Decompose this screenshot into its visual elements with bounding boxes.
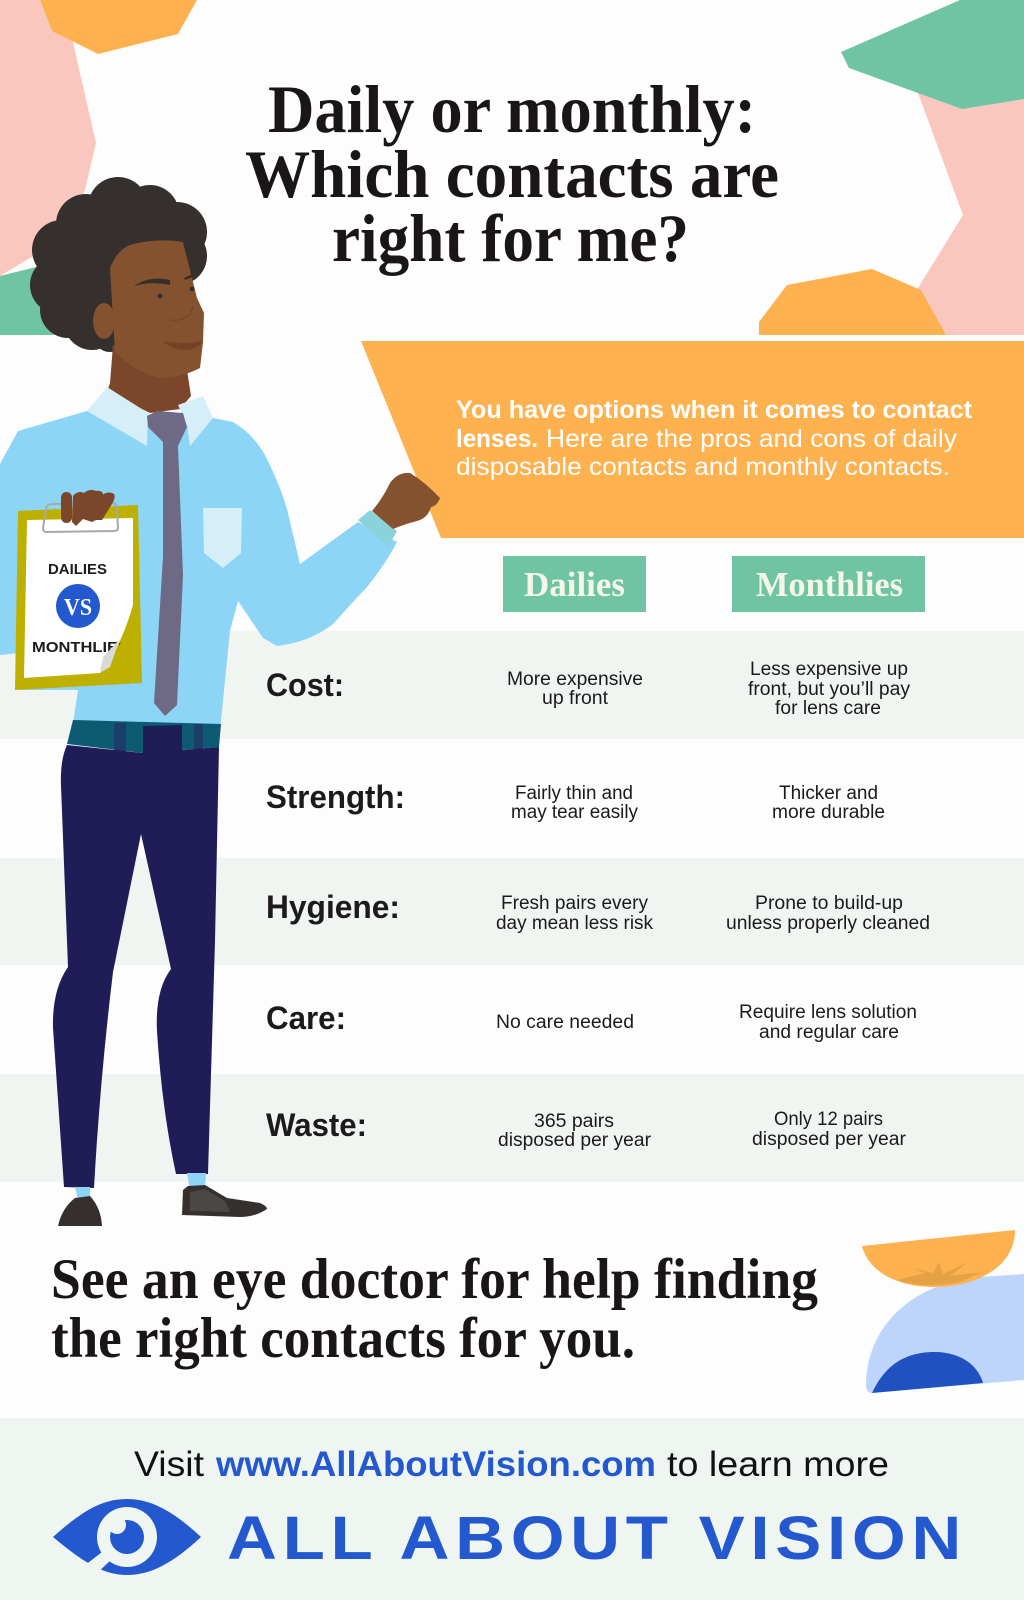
- intro text: disposable contacts and monthly contacts.: [456, 453, 950, 481]
- collar: [87, 387, 213, 446]
- row: hygiene: [266, 889, 930, 934]
- decorative shapes: top right: [759, 0, 1024, 335]
- vs badge: [56, 584, 100, 628]
- row: waste: Waste:: [266, 1107, 367, 1143]
- neck: [107, 345, 191, 413]
- row: strength: Strength:: [266, 779, 405, 815]
- illustration: man with clipboard: [0, 177, 440, 1226]
- row: care: No care needed: [496, 1012, 634, 1033]
- row: hygiene: Fresh pairs every: [501, 893, 648, 914]
- row: care: [266, 1000, 917, 1043]
- closing statement: the right contacts for you.: [51, 1307, 635, 1370]
- row: cost: front, but you’ll pay: [748, 679, 911, 700]
- logo: eye: [53, 1499, 201, 1575]
- clipboard text: monthlies: MONTHLIES: [32, 639, 129, 656]
- pocket: [203, 508, 242, 568]
- intro text: lenses.: [456, 425, 538, 453]
- hair: [30, 177, 207, 352]
- belt: [67, 720, 221, 753]
- clipboard text: dailies: DAILIES: [48, 561, 107, 578]
- row: cost: More expensive: [507, 669, 643, 690]
- call to action: Visit: [134, 1445, 204, 1484]
- title: Daily or monthly:: [268, 71, 756, 147]
- row: strength: Fairly thin and: [515, 783, 633, 804]
- row: care: and regular care: [759, 1022, 899, 1043]
- column header: Monthlies: Monthlies: [756, 565, 903, 604]
- holding fingers: [61, 490, 115, 526]
- row: waste: 365 pairs: [534, 1111, 614, 1132]
- clipboard: [15, 490, 142, 690]
- column header: Dailies: Dailies: [524, 565, 625, 604]
- mouth and nose: [163, 306, 203, 350]
- panel: intro banner: [361, 341, 1024, 538]
- row: cost: up front: [542, 688, 609, 709]
- tie: [147, 411, 187, 716]
- row: waste: Only 12 pairs: [774, 1109, 883, 1130]
- trousers: [53, 725, 219, 1188]
- call to action: [134, 1445, 889, 1484]
- face: [110, 240, 204, 378]
- row: strength: Thicker and: [779, 783, 878, 804]
- eyes and brows: [134, 271, 199, 298]
- table row backgrounds: [0, 631, 1024, 1182]
- row: cost: for lens care: [775, 698, 881, 719]
- title: Which contacts are: [245, 136, 779, 212]
- vs badge: VS: [64, 595, 92, 621]
- row: hygiene: day mean less risk: [496, 913, 653, 934]
- title: right for me?: [332, 200, 689, 276]
- panel: footer: [0, 1418, 1024, 1600]
- closing statement: [51, 1248, 818, 1370]
- call to action: www.AllAboutVision.com: [215, 1445, 656, 1484]
- row: waste: [266, 1107, 907, 1151]
- row: strength: may tear easily: [511, 802, 638, 823]
- column header: Dailies: [503, 556, 646, 612]
- shirt: [0, 411, 397, 730]
- row: strength: [266, 779, 885, 823]
- cuff: [358, 510, 397, 547]
- ear: [93, 303, 115, 339]
- row: waste: disposed per year: [752, 1129, 907, 1150]
- clip: [43, 503, 118, 532]
- row: hygiene: Prone to build-up: [755, 893, 903, 914]
- row: hygiene: unless properly cleaned: [726, 913, 930, 934]
- row: strength: more durable: [772, 802, 885, 823]
- logo: wordmark: ALL ABOUT VISION: [227, 1504, 967, 1572]
- row: cost: Less expensive up: [750, 659, 908, 680]
- closing statement: See an eye doctor for help finding: [51, 1248, 818, 1311]
- call to action: to learn more: [667, 1445, 889, 1484]
- row: cost: Cost:: [266, 667, 344, 703]
- shoes: [58, 1185, 267, 1226]
- row: hygiene: Hygiene:: [266, 889, 400, 925]
- socks: [75, 1173, 206, 1200]
- intro text: Here are the pros and cons of daily: [546, 425, 958, 453]
- intro text: [456, 396, 973, 481]
- pointing hand: [372, 473, 440, 529]
- page curl: [100, 600, 142, 683]
- row: cost: [266, 659, 911, 719]
- intro text: You have options when it comes to contact: [456, 396, 973, 424]
- row: care: Care:: [266, 1000, 346, 1036]
- decorative eye illustration: [862, 1230, 1024, 1393]
- title: [245, 71, 779, 276]
- row: care: Require lens solution: [739, 1002, 917, 1023]
- row: waste: disposed per year: [498, 1130, 652, 1151]
- decorative shapes: top left: [0, 0, 197, 335]
- column header: Monthlies: [732, 556, 925, 612]
